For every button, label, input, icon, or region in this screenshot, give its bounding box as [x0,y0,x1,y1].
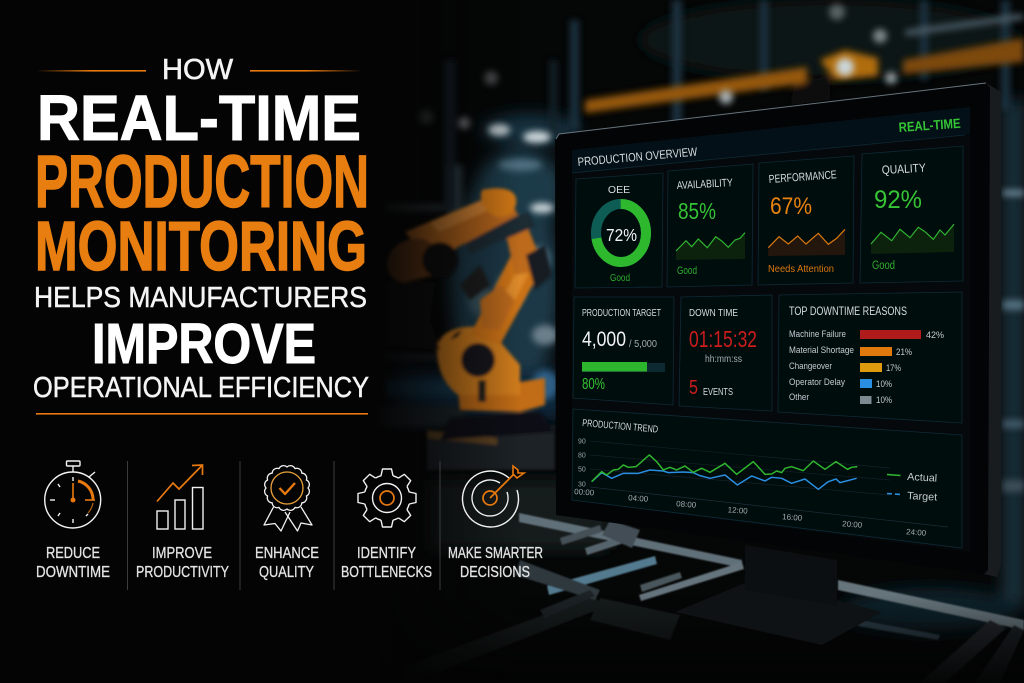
panel: production target: 80% [582,376,605,393]
benefit: reduce downtime: DOWNTIME [36,564,110,581]
production overview heading: PRODUCTION OVERVIEW [577,145,698,169]
panel: top downtime reasons: Operator Delay [789,377,845,388]
title block: HOW [162,54,234,86]
label: IDENTIFY [357,545,416,562]
panel: down time: DOWN TIME [689,307,738,319]
panel: down time: EVENTS [703,387,733,398]
panel: availability: AVAILABILITY [677,177,734,192]
panel: top downtime reasons: 17% [886,363,901,374]
panel: availability: Good [677,265,697,277]
label: REDUCE [46,545,100,562]
panel: production trend: 80 [578,452,586,460]
dashboard content [572,116,963,548]
panel: production trend: 30 [578,482,586,488]
panel: OEE: Good [610,272,630,284]
title block: MONITORING [35,207,367,285]
panel: down time: 01:15:32 [689,326,757,352]
panel: top downtime reasons: 42% [926,330,945,341]
benefit: improve productivity: PRODUCTIVITY [136,564,229,581]
benefit: identify bottlenecks [341,469,432,581]
panel: production trend [572,409,962,548]
panel: quality: QUALITY [881,161,926,177]
panel: production trend: 12:00 [727,505,749,516]
real-time label: REAL-TIME [898,116,961,135]
panel: production trend: 20:00 [842,519,863,530]
panel: availability [667,164,753,287]
panel: performance: 67% [770,193,812,220]
panel: top downtime reasons: Machine Failure [789,329,846,340]
benefit: improve productivity [136,465,229,581]
panel: OEE [575,173,663,288]
panel: production trend: 24:00 [906,527,927,538]
panel: production trend: Target [907,490,938,504]
panel: top downtime reasons [778,292,962,423]
conveyor [400,513,1024,683]
panel: top downtime reasons: Material Shortage [789,345,854,356]
orange overhead beam [585,38,1024,113]
panel: production target [573,297,674,405]
robot arm [385,188,555,470]
panel: quality [860,146,963,283]
title block: OPERATIONAL EFFICIENCY [33,372,369,404]
icon: award badge [264,466,312,531]
label: MAKE SMARTER [448,545,543,562]
title block: PRODUCTION [35,140,369,223]
panel: availability: 85% [678,198,716,224]
panel: production target: 4,000 [582,328,626,351]
panel: quality: 92% [874,186,922,214]
monitor [555,83,1001,577]
panel: top downtime reasons: 10% [876,395,892,406]
icon: stopwatch [45,461,101,528]
panel: production trend: Actual [907,471,937,485]
bokeh behind the robot [380,159,558,427]
title block: REAL-TIME [37,82,361,154]
benefit: enhance quality [255,466,319,581]
benefit: identify bottlenecks: BOTTLENECKS [341,564,432,581]
panel: top downtime reasons: Changeover [789,361,832,372]
panel: top downtime reasons: 10% [876,379,892,390]
label: ENHANCE [255,545,319,562]
benefit: reduce downtime [36,461,110,581]
panel: performance: Needs Attention [768,263,834,275]
icon: growth bars [157,465,203,529]
panel: production trend: 08:00 [676,499,697,510]
benefit: make smarter decisions: DECISIONS [460,564,530,581]
panel: down time: 5 [689,377,698,399]
title block [33,54,369,415]
icon: target with dart [462,466,524,527]
panel: production trend: 16:00 [782,512,803,523]
panel: down time: hh:mm:ss [705,354,742,365]
title block: HELPS MANUFACTURERS [34,282,367,314]
panel: performance: PERFORMANCE [768,169,837,186]
panel: top downtime reasons: 21% [896,347,912,358]
panel: production target: / 5,000 [629,338,657,350]
icon: gear [358,469,416,527]
panel: OEE: OEE [608,184,630,196]
left dark overlay [0,0,520,683]
panel: top downtime reasons: TOP DOWNTIME REASONS [789,306,907,318]
panel: production trend: 04:00 [628,493,649,504]
label: IMPROVE [152,545,212,562]
panel: quality: Good [872,260,895,272]
monitor stand [675,545,882,645]
panel: production target: PRODUCTION TARGET [582,307,661,319]
panel: production trend: 50 [578,466,586,474]
panel: top downtime reasons: Other [789,392,809,403]
title block: IMPROVE [92,312,316,376]
panel: production trend: 90 [578,438,586,446]
panel: OEE: 72% [606,225,637,245]
panel: production trend: 00:00 [574,487,595,498]
benefit: enhance quality: QUALITY [259,564,314,581]
panel: performance [758,156,854,285]
panel: down time [679,295,772,411]
benefit: make smarter decisions [448,466,543,581]
panel: production trend: PRODUCTION TREND [582,418,658,436]
